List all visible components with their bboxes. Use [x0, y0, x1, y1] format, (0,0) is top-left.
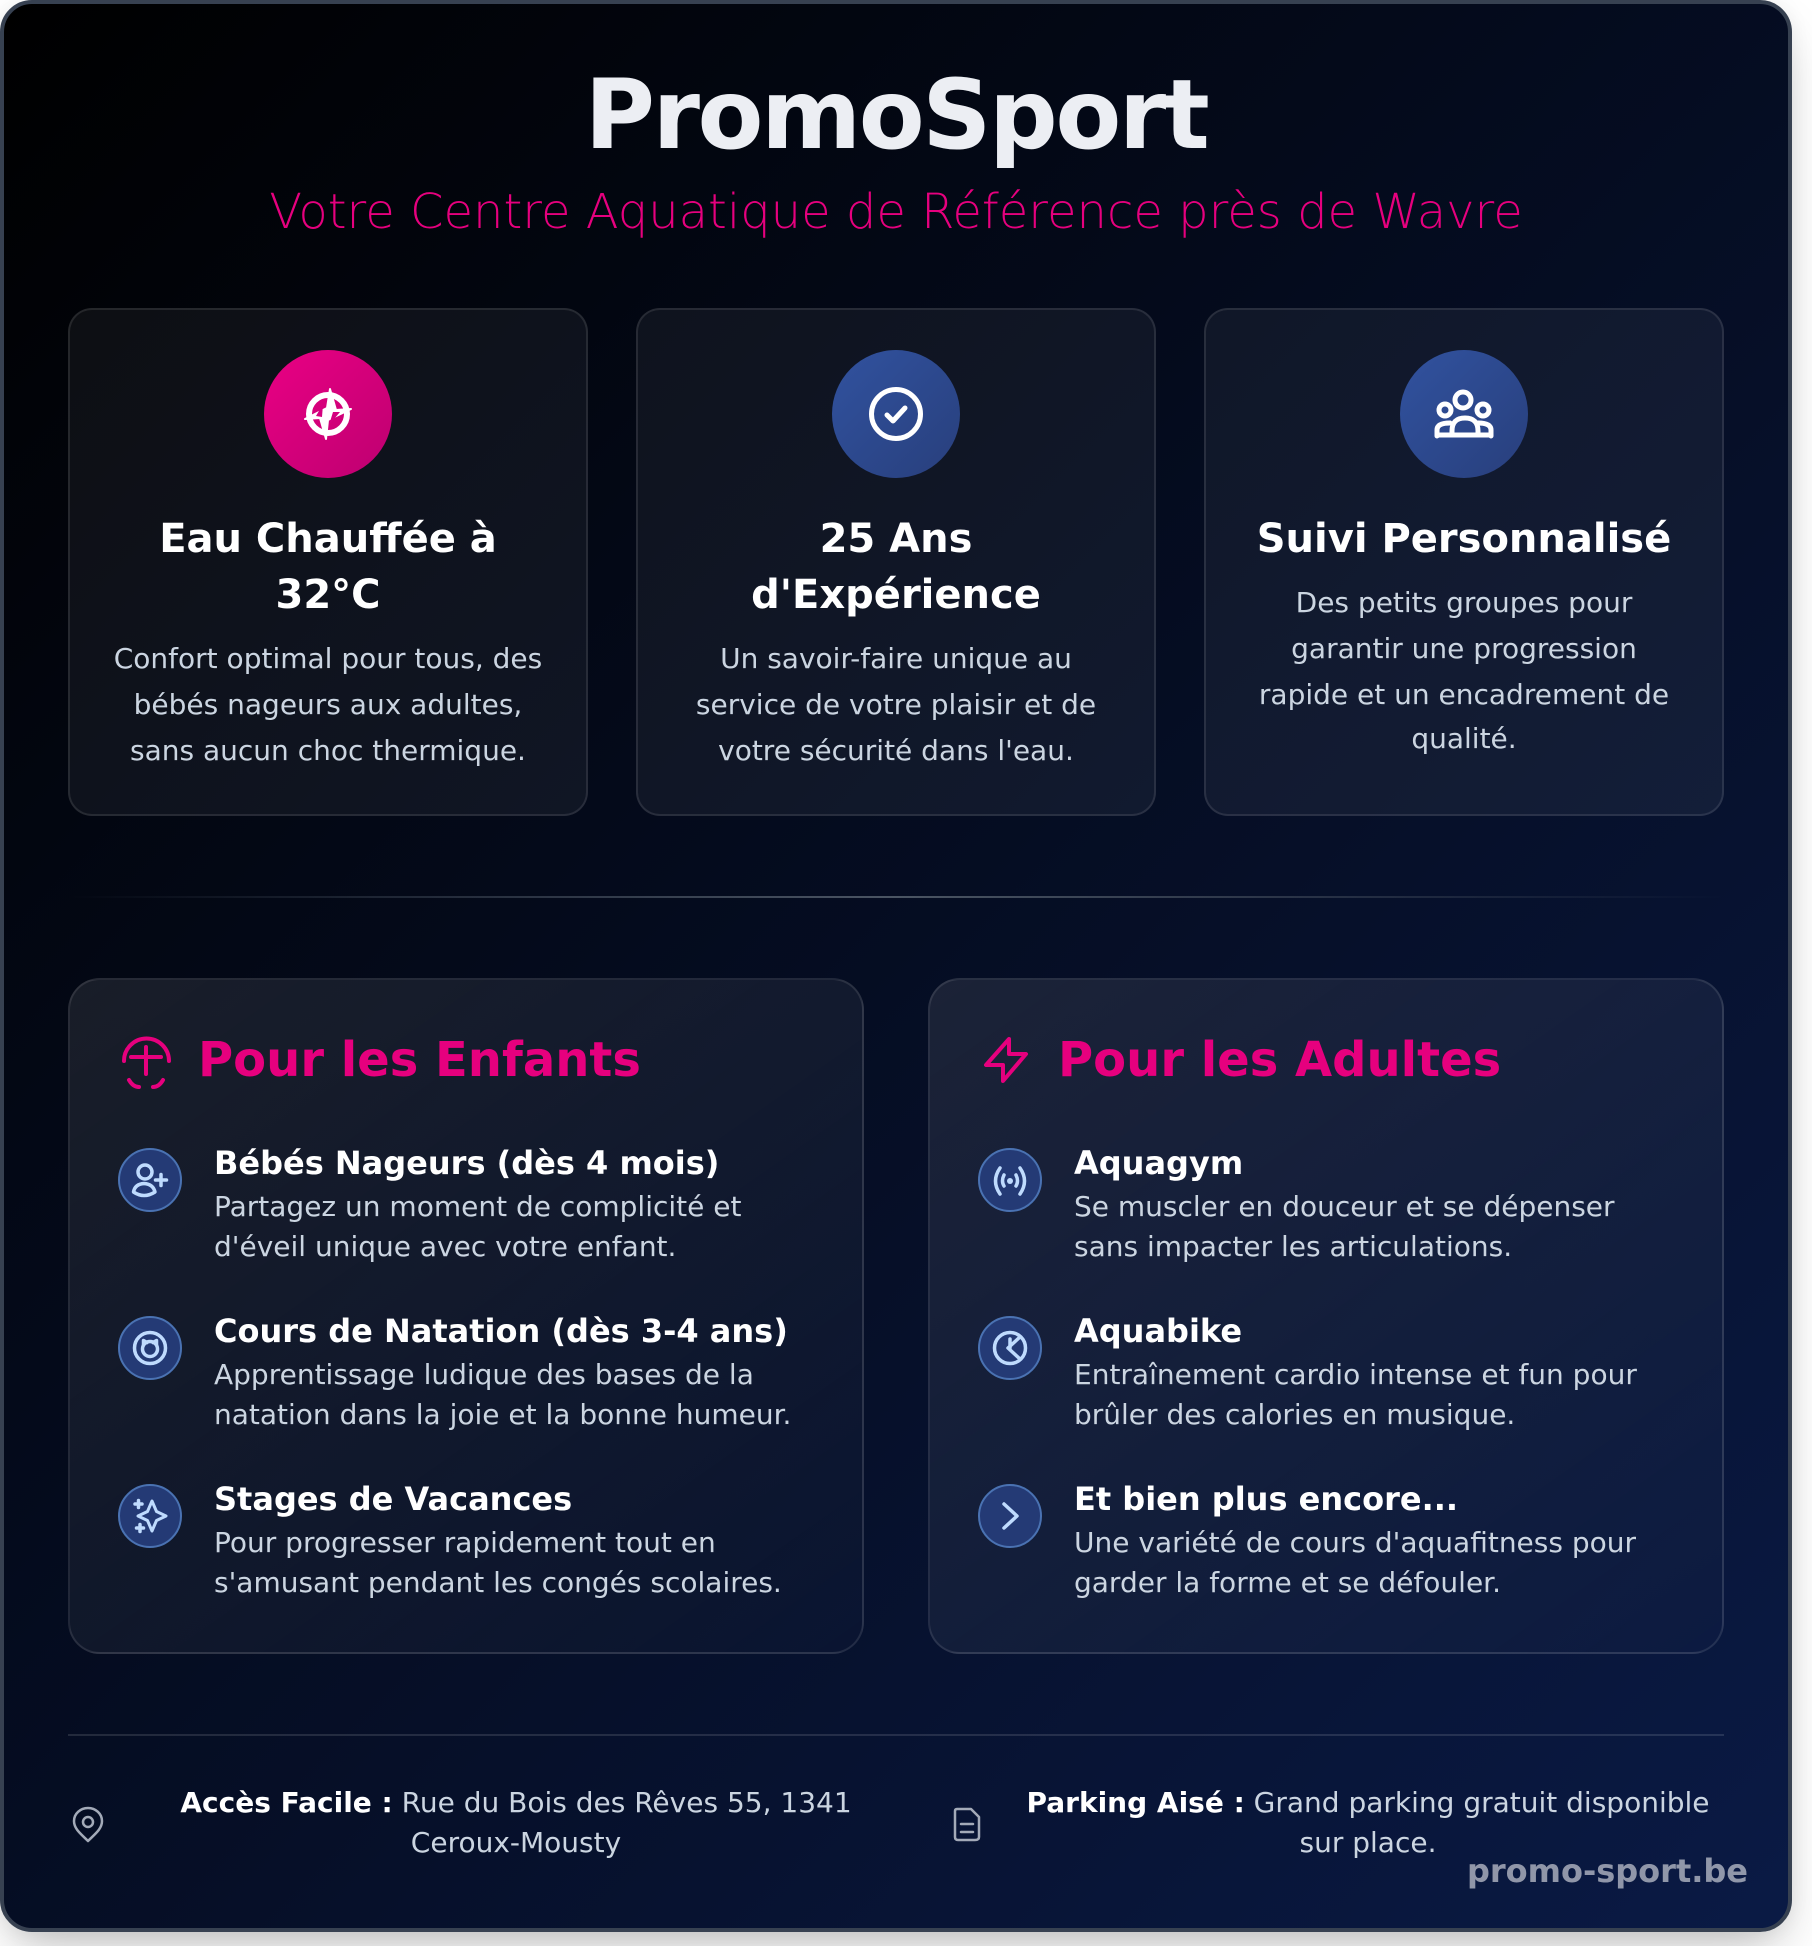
item: bébés nageurs: d'éveil unique avec votre enfant. — [214, 1230, 676, 1263]
item: et bien plus encore: Une variété de cours d'aquafitness pour — [1074, 1526, 1636, 1559]
footer: accès facile: Accès Facile : Rue du Bois des Rêves 55, 1341 — [180, 1786, 852, 1819]
item: cours de natation: Apprentissage ludique des bases de la — [214, 1358, 754, 1391]
text: eau chauffée — [114, 642, 542, 767]
icon: location pin — [72, 1806, 104, 1842]
icon: aquagym — [978, 1148, 1042, 1212]
icon: adultes — [984, 1037, 1028, 1083]
text: suivi: rapide et un encadrement de — [1259, 678, 1669, 711]
icon: document — [954, 1808, 980, 1842]
footer: parking aisé: sur place. — [1300, 1826, 1436, 1859]
icon: group — [1400, 350, 1528, 478]
item: aquabike: Entraînement cardio intense et fun pour — [1074, 1358, 1637, 1391]
footer: accès facile — [180, 1786, 852, 1859]
heading: expérience: d'Expérience — [751, 572, 1041, 618]
item: aquagym: Se muscler en douceur et se dépenser — [1074, 1190, 1615, 1223]
heading: enfants: Pour les Enfants — [198, 1032, 641, 1088]
text: suivi — [1259, 586, 1669, 755]
footer: accès facile: Ceroux-Mousty — [411, 1826, 621, 1859]
item: bébés nageurs: Bébés Nageurs (dès 4 mois) — [214, 1144, 719, 1182]
item: et bien plus encore: garder la forme et se défouler. — [1074, 1566, 1501, 1599]
item: aquagym: Aquagym — [1074, 1144, 1243, 1182]
text: eau chauffée: sans aucun choc thermique. — [130, 734, 526, 767]
website label: promo-sport.be — [1467, 1852, 1748, 1890]
item: stages de vacances: s'amusant pendant les congés scolaires. — [214, 1566, 782, 1599]
subtitle: Votre Centre Aquatique de Référence près de Wavre — [269, 184, 1523, 240]
item: bébés nageurs: Partagez un moment de complicité et — [214, 1190, 741, 1223]
footer: parking aisé — [1026, 1786, 1710, 1859]
heading: expérience: 25 Ans — [820, 516, 972, 562]
item: aquabike: Aquabike — [1074, 1312, 1242, 1350]
text: expérience: votre sécurité dans l'eau. — [718, 734, 1074, 767]
icon: aquabike — [978, 1316, 1042, 1380]
item: stages de vacances: Stages de Vacances — [214, 1480, 572, 1518]
text: eau chauffée: bébés nageurs aux adultes, — [134, 688, 522, 721]
text: suivi: Des petits groupes pour — [1296, 586, 1632, 619]
text: expérience: Un savoir-faire unique au — [720, 642, 1072, 675]
icon: bébés — [118, 1148, 182, 1212]
footer: parking aisé: Parking Aisé : Grand parking gratuit disponible — [1026, 1786, 1710, 1819]
panel: pour les adultes — [928, 978, 1724, 1654]
item: cours de natation — [214, 1312, 791, 1431]
icon: compass bolt — [264, 350, 392, 478]
item: aquagym: sans impacter les articulations. — [1074, 1230, 1512, 1263]
item: et bien plus encore — [1074, 1480, 1636, 1599]
icon: check circle — [832, 350, 960, 478]
divider — [68, 896, 1724, 898]
heading: eau chauffée: 32°C — [275, 572, 381, 618]
heading: eau chauffée — [159, 516, 497, 618]
heading: suivi: Suivi Personnalisé — [1257, 516, 1671, 562]
heading: expérience — [751, 516, 1041, 618]
footer rule — [68, 1734, 1724, 1736]
text: expérience — [696, 642, 1096, 767]
icon: chevron — [978, 1484, 1042, 1548]
icon: enfants — [122, 1036, 171, 1089]
text: suivi: garantir une progression — [1291, 632, 1637, 665]
item: cours de natation: natation dans la joie et la bonne humeur. — [214, 1398, 791, 1431]
text: eau chauffée: Confort optimal pour tous, des — [114, 642, 542, 675]
item: aquagym — [1074, 1144, 1615, 1263]
panel: feature expérience — [636, 308, 1156, 816]
item: stages de vacances — [214, 1480, 782, 1599]
heading: eau chauffée: Eau Chauffée à — [159, 516, 497, 562]
panel: feature suivi — [1204, 308, 1724, 816]
heading: adultes: Pour les Adultes — [1058, 1032, 1501, 1088]
item: cours de natation: Cours de Natation (dès 3-4 ans) — [214, 1312, 788, 1350]
item: aquabike — [1074, 1312, 1637, 1431]
item: aquabike: brûler des calories en musique. — [1074, 1398, 1515, 1431]
title: PromoSport — [585, 59, 1207, 171]
icon: natation — [118, 1316, 182, 1380]
icon: stages — [118, 1484, 182, 1548]
panel: pour les enfants — [68, 978, 864, 1654]
panel: feature eau chauffée — [68, 308, 588, 816]
text: expérience: service de votre plaisir et de — [696, 688, 1096, 721]
item: et bien plus encore: Et bien plus encore... — [1074, 1480, 1458, 1518]
text: suivi: qualité. — [1411, 722, 1517, 755]
item: bébés nageurs — [214, 1144, 741, 1263]
item: stages de vacances: Pour progresser rapidement tout en — [214, 1526, 716, 1559]
